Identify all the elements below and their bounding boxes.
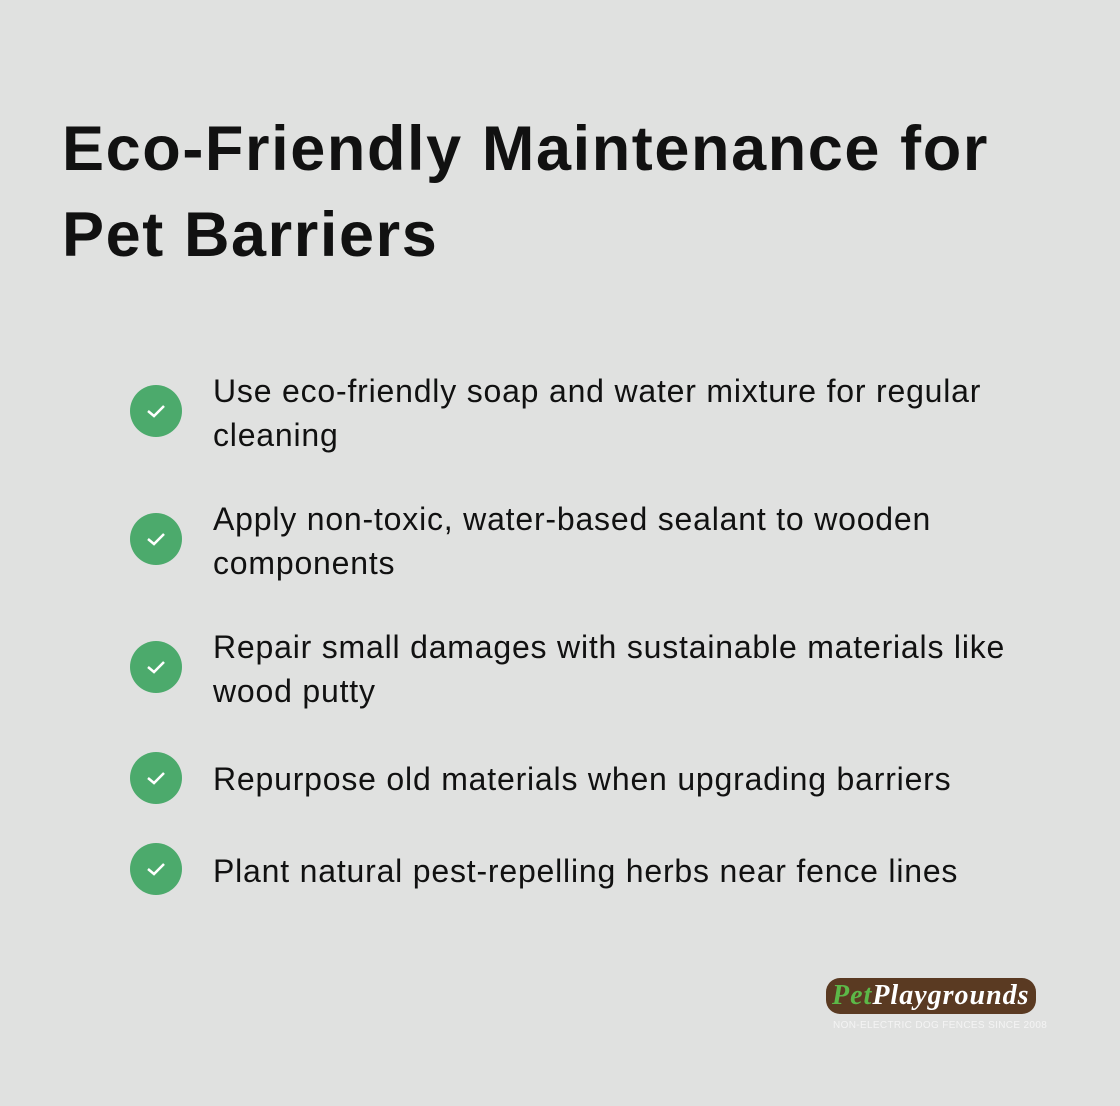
text 5: Plant natural pest-repelling herbs near fence lines: [213, 853, 958, 889]
icon: check: [130, 641, 182, 693]
title: Pet Barriers: [62, 200, 438, 270]
icon: check: [130, 752, 182, 804]
text 3: [213, 629, 1005, 709]
text 4: Repurpose old materials when upgrading barriers: [213, 761, 951, 797]
text 3: wood putty: [213, 673, 376, 709]
item 2: [130, 501, 931, 581]
text 1: [213, 373, 981, 453]
title: [62, 114, 989, 270]
item 3: [130, 629, 1005, 709]
item 1: [130, 373, 981, 453]
text 1: Use eco-friendly soap and water mixture for regular: [213, 373, 981, 409]
item 5: [130, 843, 958, 895]
item 4: [130, 752, 951, 804]
text 3: Repair small damages with sustainable materials like: [213, 629, 1005, 665]
logo tagline: NON-ELECTRIC DOG FENCES SINCE 2008: [833, 1020, 1047, 1031]
icon: check: [130, 513, 182, 565]
logo: [826, 978, 1047, 1031]
text 2: components: [213, 545, 395, 581]
icon: check: [130, 843, 182, 895]
text 2: Apply non-toxic, water-based sealant to wooden: [213, 501, 931, 537]
logo wordmark: PetPlaygrounds: [832, 980, 1030, 1011]
text 1: cleaning: [213, 417, 339, 453]
icon: check: [130, 385, 182, 437]
text 2: [213, 501, 931, 581]
title: Eco-Friendly Maintenance for: [62, 114, 989, 184]
